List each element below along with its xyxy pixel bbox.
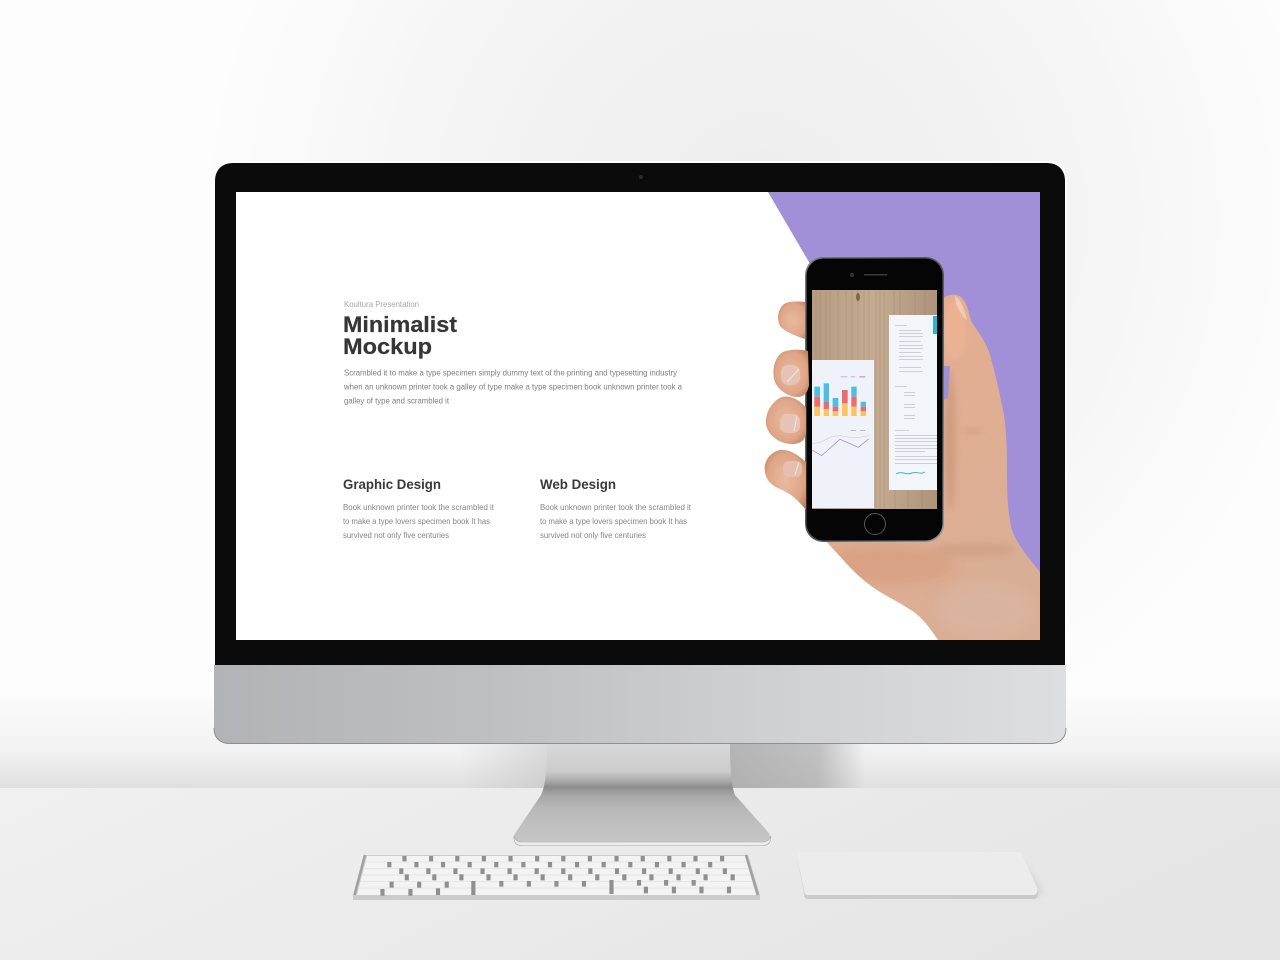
palm and thumb [825, 295, 1040, 640]
chin lower edge [214, 728, 1066, 744]
silver chin [214, 665, 1066, 744]
hand shading [834, 306, 1012, 623]
thumb nail highlight [955, 296, 967, 320]
column heading: graphic design: Graphic Design [343, 477, 441, 492]
keyboard side edges [354, 855, 758, 895]
keyboard [353, 855, 760, 900]
finger four [765, 450, 806, 510]
column text: graphic design: Book unknown printer took the scrambled it [343, 503, 495, 512]
purple gap between thumb and phone [943, 366, 950, 400]
slide title: Minimalist [343, 312, 458, 337]
monitor shadow on wall [460, 744, 865, 792]
desk surface [0, 788, 1280, 960]
slide title line two: Mockup [343, 334, 432, 359]
trackpad shadow [1022, 858, 1044, 897]
finger three [766, 397, 806, 444]
slide screen [236, 192, 1040, 640]
speaker and camera [850, 273, 887, 277]
monitor [213, 161, 1067, 744]
right paper with text [889, 315, 937, 490]
finger two [773, 350, 809, 397]
monitor glow edge [213, 161, 1067, 669]
fingernails [780, 365, 802, 477]
column text: web design: survived not only five centuries [540, 531, 646, 540]
column text: graphic design [343, 503, 495, 540]
keyboard row lines [358, 862, 754, 888]
slide kicker: Koultura Presentation [344, 300, 419, 309]
stacked bar chart [814, 376, 866, 431]
intro paragraph [343, 368, 683, 406]
keyboard key gaps [380, 856, 735, 896]
phone body [805, 257, 944, 542]
intro paragraph: Scrambled it to make a type specimen simply dummy text of the printing and typesetting industry [344, 368, 677, 378]
column text: web design [540, 503, 692, 540]
webcam [639, 175, 643, 179]
intro paragraph: galley of type and scrambled it [344, 396, 450, 406]
intro paragraph: when an unknown printer took a galley of type make a type specimen book unknown printer took a [343, 382, 683, 392]
left paper with charts [812, 360, 874, 508]
column text: graphic design: to make a type lovers specimen book It has [343, 517, 490, 526]
column text: web design: Book unknown printer took the scrambled it [540, 503, 692, 512]
home button [864, 514, 886, 534]
phone screen wood photo [812, 290, 937, 509]
fingers in front of phone [765, 350, 809, 510]
monitor stand [514, 744, 771, 846]
line chart [812, 436, 869, 456]
finger one [778, 301, 808, 340]
purple wedge [768, 192, 1040, 640]
smartphone [805, 257, 944, 542]
trackpad [797, 852, 1044, 899]
wall lower shading [0, 690, 1280, 792]
column text: web design: to make a type lovers specimen book It has [540, 517, 687, 526]
hand behind phone [778, 295, 1040, 640]
column text: graphic design: survived not only five centuries [343, 531, 449, 540]
black bezel [215, 163, 1065, 665]
column heading: web design: Web Design [540, 477, 616, 492]
